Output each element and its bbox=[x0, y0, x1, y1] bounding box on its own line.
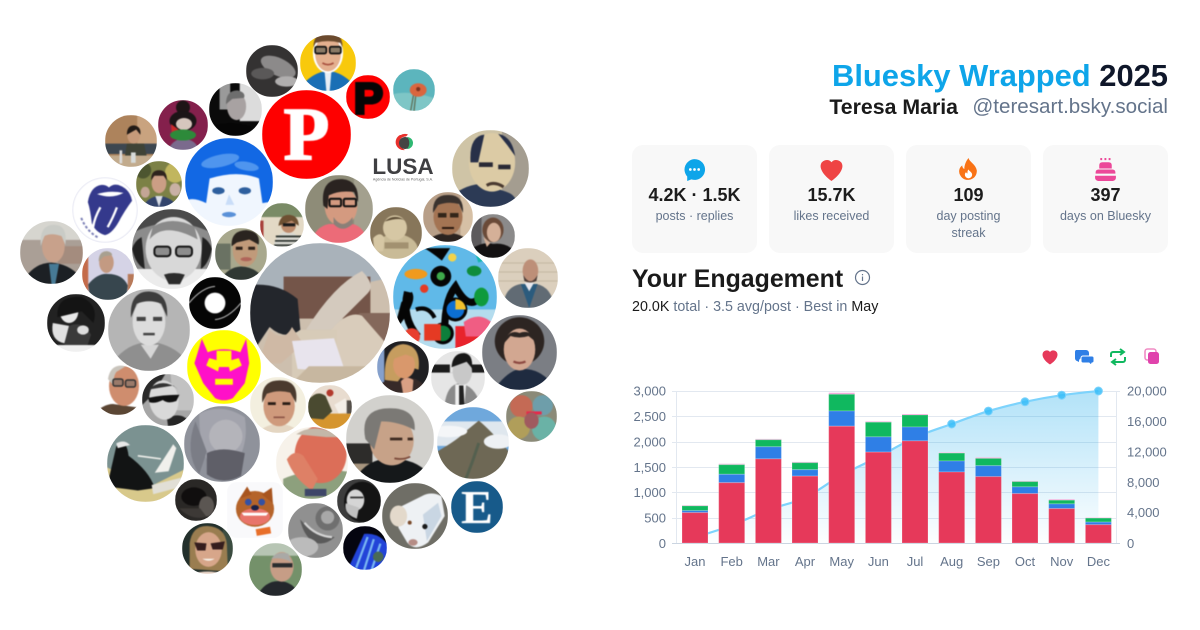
icon: flame bbox=[956, 157, 981, 182]
right axis labels: 0 bbox=[1127, 536, 1134, 551]
icon: chat bubble bbox=[682, 157, 707, 182]
stat card: posts and replies bbox=[632, 145, 757, 253]
avatar: woman with dark hair bbox=[482, 315, 557, 390]
icon: legend replies bbox=[1075, 350, 1094, 365]
left axis labels: 500 bbox=[644, 510, 666, 526]
bar: Dec bbox=[1085, 518, 1111, 543]
stat card: likes bbox=[769, 145, 894, 253]
cumulative area bbox=[695, 391, 1098, 543]
left axis labels: 1,000 bbox=[633, 485, 666, 500]
logo: LUSA bbox=[372, 134, 434, 182]
avatar: woman in stripes bbox=[260, 203, 304, 247]
avatar: woman resting on hand bbox=[471, 214, 515, 258]
month labels: Jul bbox=[907, 554, 923, 569]
cumulative line bbox=[695, 391, 1098, 537]
bar: Aug bbox=[939, 452, 965, 543]
avatar: keffiyeh figure on maroon bbox=[158, 100, 208, 150]
month labels: Oct bbox=[1015, 554, 1035, 569]
avatar: small red P logo bbox=[346, 75, 390, 119]
avatar: big red P logo bbox=[262, 90, 351, 179]
avatar: comic sailor bbox=[107, 425, 184, 502]
stat card: streak: 109 bbox=[953, 185, 984, 205]
month labels: Jan bbox=[685, 554, 705, 569]
icon: legend reposts bbox=[1111, 349, 1125, 365]
stat card: streak: streak bbox=[951, 226, 986, 240]
avatar: tongue logo bbox=[72, 177, 138, 243]
avatar: blonde woman bbox=[377, 341, 429, 393]
avatar: man in blue t-shirt bbox=[82, 248, 134, 300]
bar: Feb bbox=[719, 464, 745, 543]
avatar: mouth and nose close-up bbox=[288, 503, 343, 558]
avatar: yellow and magenta dog bbox=[187, 330, 261, 404]
avatar: bearded man looking up bbox=[184, 406, 260, 482]
avatar: grey hands bbox=[246, 45, 298, 97]
month labels: Nov bbox=[1050, 554, 1074, 569]
right axis labels: 12,000 bbox=[1127, 444, 1167, 460]
avatar: woman in sunglasses bbox=[182, 523, 233, 574]
avatar: large painting bbox=[250, 243, 390, 383]
avatar: man in suit black and white bbox=[431, 351, 485, 405]
bar: Apr bbox=[792, 462, 818, 543]
avatar: man with glasses, grey bbox=[132, 209, 212, 289]
icon: cake bbox=[1093, 157, 1118, 182]
left axis labels: 2,000 bbox=[633, 434, 666, 450]
avatar: man with vest bbox=[498, 248, 558, 308]
legend icons bbox=[1040, 347, 1162, 367]
avatar: woman with hand near face bbox=[276, 427, 348, 499]
avatar: blue fan bbox=[343, 526, 387, 570]
stat card: likes: 15.7K bbox=[807, 185, 856, 205]
stat card: posts and replies: posts · replies bbox=[656, 209, 733, 223]
avatar: blue child bbox=[185, 138, 273, 226]
avatar: cat bbox=[308, 385, 352, 429]
avatar: boy on yellow bbox=[300, 35, 356, 91]
icon: info bbox=[854, 269, 871, 286]
avatar: man in sunglasses bbox=[142, 374, 194, 426]
avatar: sepia baby bbox=[370, 207, 422, 259]
month labels: May bbox=[829, 554, 854, 569]
right axis labels: 8,000 bbox=[1127, 475, 1160, 490]
left axis labels: 0 bbox=[659, 536, 666, 551]
heading: your engagement: Your Engagement bbox=[632, 265, 843, 293]
cumulative dots bbox=[948, 387, 1102, 428]
icon: legend heart bbox=[1042, 350, 1058, 364]
avatar: Miro painting bbox=[393, 245, 497, 349]
avatar: grey haired man with lanyard bbox=[20, 221, 83, 284]
bar: Jun bbox=[865, 421, 891, 543]
avatar: big red P logo: P bbox=[284, 93, 329, 176]
icon: heart bbox=[819, 157, 844, 182]
avatar: man at microphone bbox=[105, 115, 157, 167]
avatar: man portrait bbox=[250, 377, 306, 433]
left axis labels: 3,000 bbox=[633, 384, 666, 398]
avatar: poppy bbox=[393, 69, 435, 111]
right axis labels: 20,000 bbox=[1127, 384, 1167, 398]
left axis labels bbox=[633, 384, 666, 551]
bar: Jul bbox=[902, 414, 928, 543]
left axis labels: 1,500 bbox=[633, 460, 666, 475]
bar: Jan bbox=[682, 505, 708, 543]
month labels bbox=[685, 554, 1110, 569]
stat card: days on Bluesky: days on Bluesky bbox=[1060, 209, 1151, 223]
bar: Mar bbox=[755, 439, 781, 543]
avatar: cartoon dog bbox=[235, 486, 275, 537]
right axis labels: 4,000 bbox=[1127, 505, 1160, 520]
stat card: days on Bluesky: 397 bbox=[1090, 185, 1121, 205]
avatar cloud bbox=[20, 35, 558, 596]
avatar: girl black and white bbox=[47, 294, 105, 352]
avatar: black and white man bbox=[209, 83, 262, 136]
avatar: man outdoors bbox=[249, 543, 302, 596]
stat card: posts and replies: 4.2K · 1.5K bbox=[648, 185, 741, 205]
right axis labels bbox=[1127, 384, 1167, 551]
avatar: older man with glasses bbox=[100, 365, 140, 415]
avatar: curly haired woman bbox=[337, 479, 381, 523]
month labels: Jun bbox=[868, 554, 889, 569]
avatar: dark portrait bbox=[175, 479, 217, 521]
avatar: bald man sepia bbox=[452, 130, 529, 207]
month labels: Mar bbox=[757, 554, 780, 569]
month labels: Dec bbox=[1087, 554, 1110, 569]
logo: LUSA: LUSA bbox=[372, 154, 434, 179]
user handle: @teresart.bsky.social bbox=[972, 95, 1168, 118]
avatar: illustrated man bbox=[423, 192, 473, 242]
avatar: man in suit bbox=[136, 161, 182, 207]
bar: Sep bbox=[975, 457, 1001, 543]
month labels: Sep bbox=[977, 554, 1000, 569]
avatar: E logo bbox=[451, 481, 503, 533]
right axis labels: 16,000 bbox=[1127, 414, 1167, 429]
bar: Nov bbox=[1049, 499, 1075, 543]
stat card: likes: likes received bbox=[794, 209, 869, 223]
logo: LUSA: Agência de Notícias de Portugal, S.A. bbox=[373, 178, 433, 182]
bar: May bbox=[829, 393, 855, 543]
user name: Teresa Maria bbox=[829, 95, 958, 119]
stat card: days on Bluesky bbox=[1043, 145, 1168, 253]
avatar: volcano bbox=[437, 407, 509, 479]
avatar: grey haired woman bbox=[346, 395, 434, 483]
avatar: colourful abstract bbox=[506, 391, 557, 442]
avatar: black ring logo bbox=[189, 277, 241, 329]
stat card: streak: day posting bbox=[937, 209, 1000, 223]
avatar: boy in grey bbox=[108, 289, 190, 371]
avatar: posterised man bbox=[215, 228, 267, 280]
icon: legend quotes bbox=[1145, 349, 1159, 364]
avatar: white dog bbox=[382, 483, 448, 549]
title: Bluesky Wrapped 2025 bbox=[832, 58, 1168, 93]
avatar: man in pink shirt bbox=[305, 175, 373, 243]
month labels: Aug bbox=[940, 554, 963, 569]
stat card: streak bbox=[906, 145, 1031, 253]
month labels: Apr bbox=[795, 554, 816, 569]
stacked bars bbox=[682, 393, 1111, 543]
engagement summary: 20.0K total · 3.5 avg/post · Best in May bbox=[632, 299, 878, 315]
bar: Oct bbox=[1012, 481, 1038, 543]
month labels: Feb bbox=[720, 554, 743, 569]
left axis labels: 2,500 bbox=[633, 409, 666, 424]
